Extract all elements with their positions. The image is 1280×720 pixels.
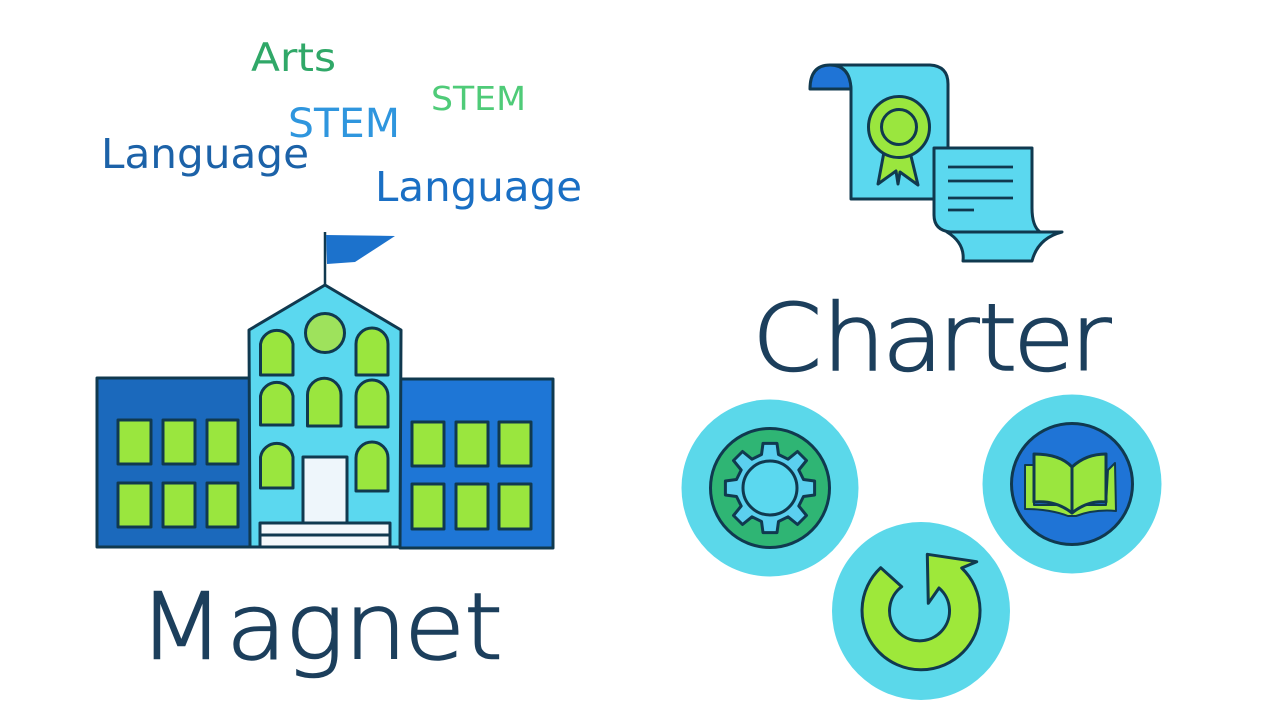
back pages xyxy=(1025,463,1116,516)
steps xyxy=(260,523,390,547)
document text lines xyxy=(948,167,1013,210)
flag xyxy=(325,232,395,286)
round window xyxy=(306,314,344,352)
left page xyxy=(1034,454,1072,513)
scroll curl xyxy=(810,65,851,89)
word: Arts: Arts xyxy=(251,36,336,81)
heading: Magnet: Magnet xyxy=(138,573,503,681)
left wing xyxy=(97,378,250,547)
arched windows xyxy=(260,328,388,491)
icon: renewal arrow badge xyxy=(832,522,1010,700)
rosette seal xyxy=(868,96,930,185)
word: STEM blue: STEM xyxy=(288,101,400,147)
document sheet xyxy=(934,148,1040,232)
left wing windows xyxy=(118,420,238,527)
icon: charter scroll and document xyxy=(810,65,1062,261)
word: Language dark blue: Language xyxy=(101,130,309,178)
gear xyxy=(725,443,815,533)
document lower fold xyxy=(947,232,1062,261)
right wing windows xyxy=(412,422,531,529)
scroll sheet xyxy=(830,65,948,199)
panel: magnet subject word cloud xyxy=(101,36,582,211)
right page xyxy=(1072,454,1106,513)
door xyxy=(303,457,347,524)
circular arrow xyxy=(862,554,980,670)
icon: gear badge xyxy=(682,400,858,576)
icon: school building xyxy=(97,232,553,548)
right wing xyxy=(400,379,553,548)
word: Language blue: Language xyxy=(375,163,582,211)
central tower xyxy=(249,285,401,547)
word: STEM green: STEM xyxy=(431,79,526,118)
heading: Charter: Charter xyxy=(752,284,1111,392)
icon: book badge xyxy=(982,394,1162,574)
